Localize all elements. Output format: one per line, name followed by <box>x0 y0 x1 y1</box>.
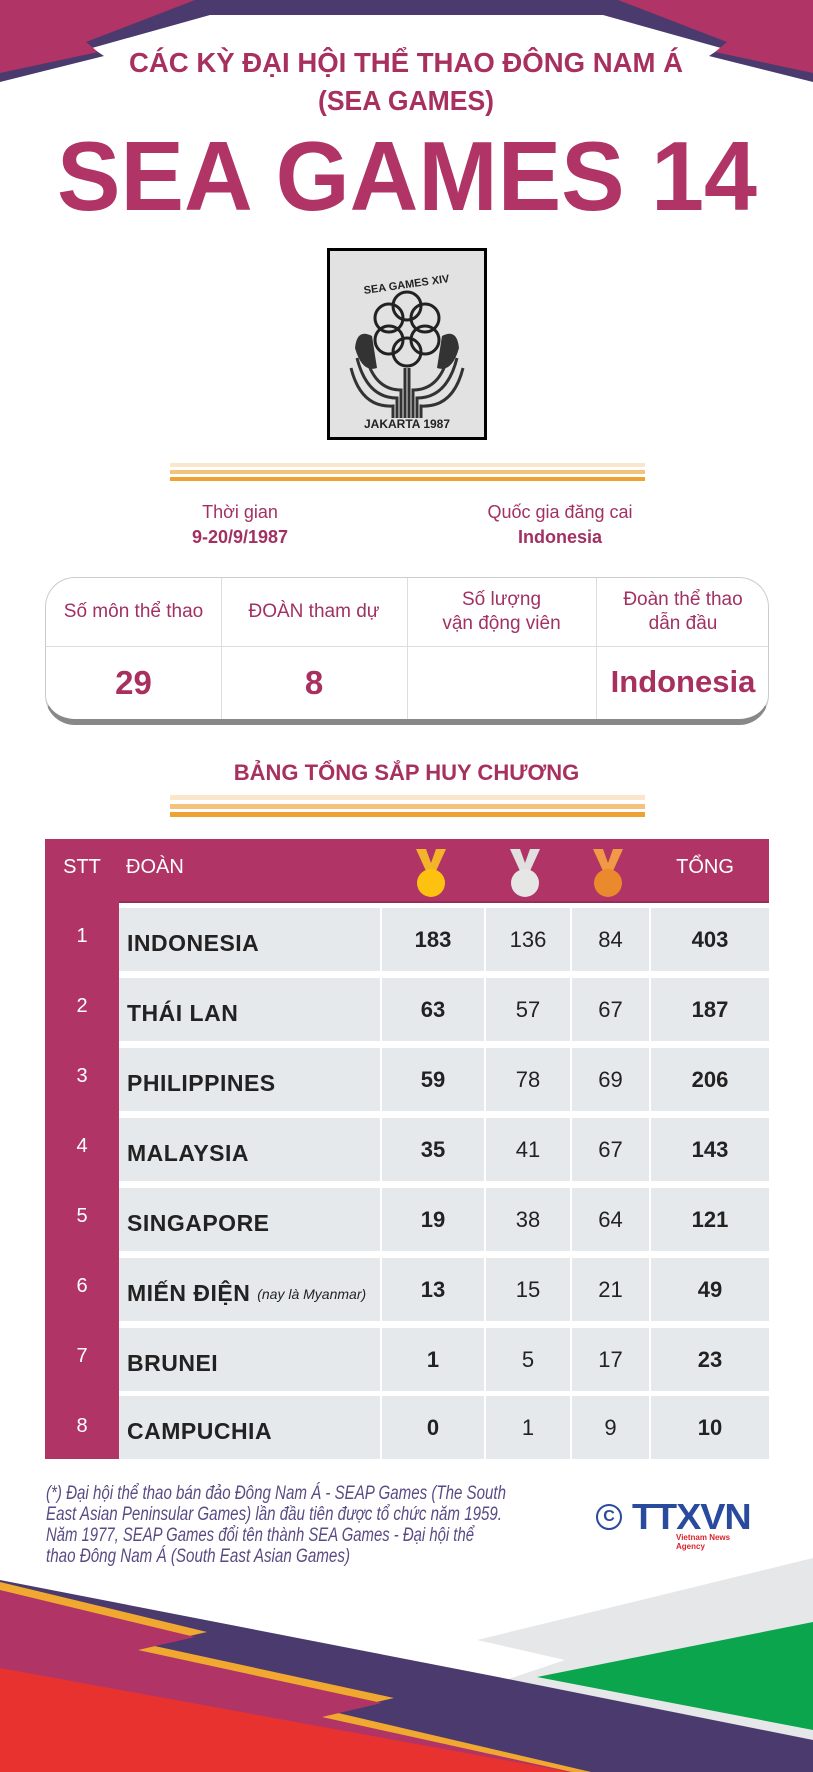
medal table: 15 <box>516 1276 540 1302</box>
medal table: 183 <box>415 926 451 952</box>
medal table: BRUNEI <box>127 1350 218 1376</box>
medal table: 5 <box>522 1346 534 1372</box>
info: time: 9-20/9/1987 <box>192 527 288 547</box>
icon: bronze medal <box>593 849 623 897</box>
medal table: THÁI LAN <box>127 1000 238 1026</box>
icon: gold medal <box>416 849 446 897</box>
medal table: 21 <box>598 1276 623 1302</box>
logo <box>327 248 487 440</box>
row 1: 1 <box>76 925 88 947</box>
medal table: 63 <box>421 996 445 1022</box>
info table <box>45 577 769 725</box>
info: host <box>487 502 633 547</box>
header: leader: dẫn đầu <box>649 613 717 634</box>
footnote: thao Đông Nam Á (South East Asian Games) <box>46 1546 350 1567</box>
header labels: STT <box>63 856 101 878</box>
icon: silver medal <box>510 849 540 897</box>
header: athletes <box>442 589 561 634</box>
medal table: 19 <box>421 1206 445 1232</box>
row 4: 4 <box>76 1135 88 1157</box>
medal table: 9 <box>604 1414 617 1440</box>
info: time <box>192 502 288 547</box>
medal table: TỔNG <box>676 856 734 878</box>
logo: TTXVN <box>596 1496 751 1551</box>
logo: TTXVN: C <box>603 1508 615 1525</box>
medal table: 0 <box>427 1414 439 1440</box>
medal table: 23 <box>698 1346 722 1372</box>
value: 29: 29 <box>115 664 152 701</box>
medal table: 10 <box>698 1414 722 1440</box>
info: host: Indonesia <box>518 527 602 547</box>
medal table: 206 <box>692 1066 728 1092</box>
bottom decoration <box>0 1558 813 1772</box>
medal table heading: BẢNG TỔNG SẮP HUY CHƯƠNG <box>234 760 579 785</box>
medal table: 69 <box>598 1066 623 1092</box>
divider stripes top <box>170 463 645 481</box>
header: leader <box>623 589 743 634</box>
subtitle: CÁC KỲ ĐẠI HỘI THỂ THAO ĐÔNG NAM Á <box>129 46 683 78</box>
medal table: ĐOÀN <box>126 856 184 878</box>
medal table: 49 <box>698 1276 722 1302</box>
medal table: 78 <box>516 1066 540 1092</box>
medal table: SINGAPORE <box>127 1210 270 1236</box>
medal table: 136 <box>510 926 546 952</box>
medal table: 403 <box>692 926 728 952</box>
logo: JAKARTA 1987 <box>364 417 450 431</box>
subtitle <box>129 46 683 116</box>
info: host: Quốc gia đăng cai <box>487 502 633 522</box>
header: sports count: Số môn thể thao <box>64 601 203 622</box>
value: 8: 8 <box>305 664 323 701</box>
footnote <box>46 1482 506 1567</box>
medal table: INDONESIA <box>127 930 259 956</box>
header: delegations: ĐOÀN tham dự <box>248 601 379 622</box>
medal table: 41 <box>516 1136 540 1162</box>
row 6: 6 <box>76 1275 88 1297</box>
logo: TTXVN: Vietnam News Agency <box>676 1533 730 1551</box>
row 2: 2 <box>76 995 88 1017</box>
medal table: 1 <box>427 1346 439 1372</box>
value: Indonesia: Indonesia <box>611 664 755 699</box>
subtitle: (SEA GAMES) <box>318 85 494 116</box>
divider stripes <box>170 795 645 817</box>
medal table: 1 <box>522 1414 534 1440</box>
row 7: 7 <box>76 1345 88 1367</box>
medal table: 67 <box>598 1136 623 1162</box>
medal table: 59 <box>421 1066 445 1092</box>
medal table: 35 <box>421 1136 445 1162</box>
medal table: 57 <box>516 996 540 1022</box>
medal table: 143 <box>692 1136 728 1162</box>
medal table: MIẾN ĐIỆN <box>127 1280 250 1306</box>
row 5: 5 <box>76 1205 88 1227</box>
medal table: 84 <box>598 926 623 952</box>
medal table: 187 <box>692 996 728 1022</box>
logo: SEA GAMES XIV <box>363 273 451 297</box>
header: athletes: Số lượng <box>462 589 541 610</box>
medal table: 17 <box>598 1346 623 1372</box>
row 8: 8 <box>76 1415 88 1437</box>
info: time: Thời gian <box>202 502 278 522</box>
row 3: 3 <box>76 1065 88 1087</box>
logo: TTXVN: TTXVN <box>632 1496 751 1537</box>
top banner decoration <box>0 0 813 82</box>
medal table: 67 <box>598 996 623 1022</box>
medal table: 38 <box>516 1206 540 1232</box>
header: leader: Đoàn thể thao <box>623 589 743 610</box>
medal table: CAMPUCHIA <box>127 1418 272 1444</box>
header: athletes: vận động viên <box>442 613 561 634</box>
medal table: MALAYSIA <box>127 1140 249 1166</box>
medal table: (nay là Myanmar) <box>257 1286 366 1302</box>
medal table: PHILIPPINES <box>127 1070 276 1096</box>
medal table: 13 <box>421 1276 445 1302</box>
medal table: 121 <box>692 1206 728 1232</box>
medal table: 64 <box>598 1206 623 1232</box>
